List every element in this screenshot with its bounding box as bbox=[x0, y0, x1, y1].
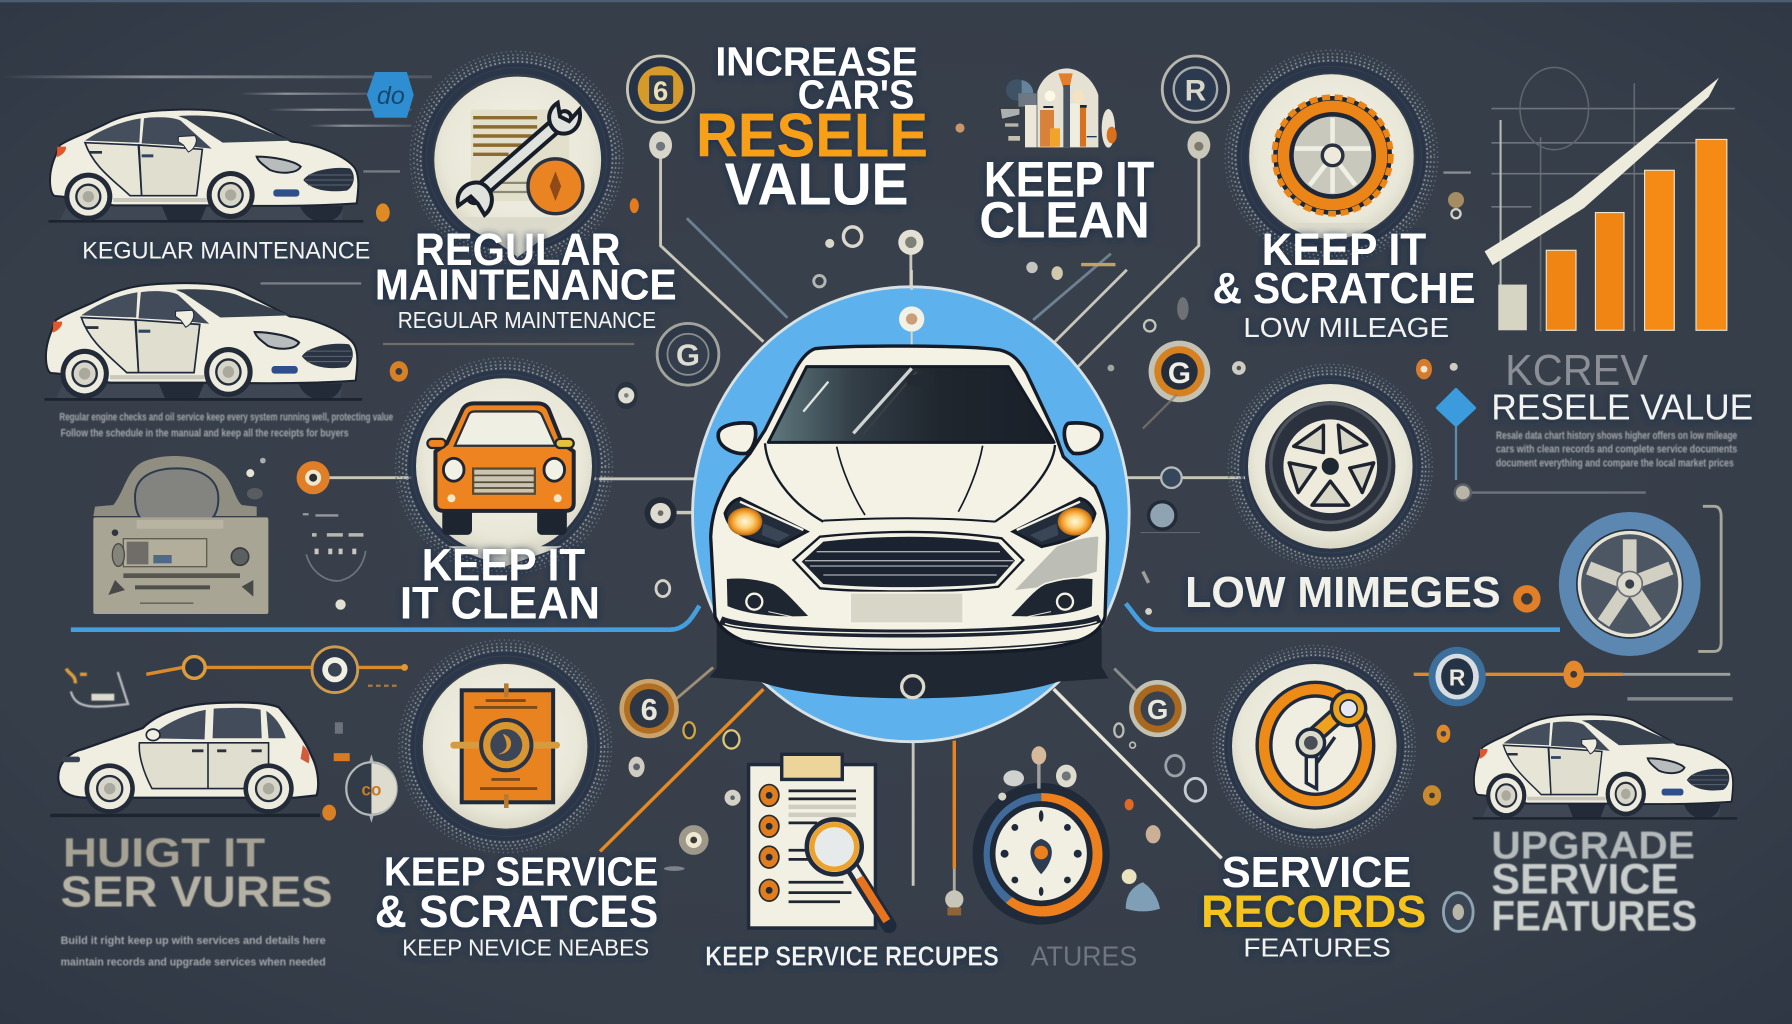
label: upgrade service features: FEATURES bbox=[1491, 892, 1697, 939]
label: huigt it servures: SER VURES bbox=[61, 868, 333, 916]
heading: keep it clean top: KEEP IT bbox=[984, 151, 1155, 208]
small decorative nodes near tire bbox=[1144, 171, 1471, 331]
heading: regular maintenance bbox=[375, 224, 677, 309]
icon: regular maintenance wrench bbox=[410, 51, 623, 264]
icon: blue rim wheel bbox=[1559, 512, 1701, 656]
heading: service records: SERVICE bbox=[1222, 849, 1411, 897]
illustration: faded dashboard box bbox=[93, 456, 268, 614]
heading: keep it & scratche bbox=[1213, 224, 1475, 313]
car: second left sedan bbox=[44, 283, 362, 401]
icon: car wash building bbox=[1000, 68, 1117, 148]
badge: six lower left bbox=[619, 679, 679, 738]
small nodes around gauge bbox=[998, 746, 1161, 911]
icon: alloy wheel bbox=[1228, 364, 1432, 568]
small caption text left upper bbox=[59, 412, 393, 440]
icon: orange tire bbox=[1225, 50, 1438, 263]
small orange node lower bbox=[390, 361, 408, 382]
small top right drop node bbox=[1187, 131, 1210, 159]
small caption text right bbox=[1496, 430, 1737, 469]
small caption text left upper: Follow the schedule in the manual and keep all the receipts for buyers bbox=[61, 428, 349, 440]
small node ring bbox=[656, 581, 670, 597]
compass badge bbox=[346, 754, 397, 823]
small orange node right bbox=[1416, 359, 1458, 379]
bar 1 bbox=[1498, 285, 1527, 330]
badge: G left: G bbox=[676, 338, 700, 373]
title: RESELE bbox=[696, 102, 928, 171]
badge: G lower right: G bbox=[1147, 694, 1168, 725]
left chain: badge O bbox=[183, 647, 408, 693]
label: resele value right: RESELE VALUE bbox=[1491, 386, 1753, 427]
badge: G lower right bbox=[1129, 680, 1186, 737]
label: huigt it servures: HUIGT IT bbox=[63, 829, 265, 875]
bar 5 bbox=[1696, 139, 1727, 330]
heading: keep it clean left bbox=[400, 540, 600, 628]
connector lines bbox=[71, 154, 1733, 894]
small nodes right of records: R bbox=[1449, 665, 1466, 691]
icon: orange service document bbox=[399, 640, 611, 853]
small caption text lower left bbox=[61, 935, 326, 969]
small orange nodes bbox=[322, 722, 350, 821]
faint gauge sketch bbox=[303, 514, 366, 581]
heading: keep service & scratces: & SCRATCES bbox=[375, 886, 658, 937]
trend arrow bbox=[1485, 78, 1719, 265]
icon: orange car keep it clean bbox=[396, 358, 612, 575]
heading: keep it clean left: IT CLEAN bbox=[400, 577, 600, 628]
small node bbox=[615, 382, 638, 409]
heading: low mimeges: LOW MIMEGES bbox=[1185, 569, 1501, 617]
compass badge: co bbox=[361, 779, 381, 799]
small cream dot bbox=[335, 599, 346, 610]
icon: service records ring bbox=[1213, 645, 1415, 847]
bar 3 bbox=[1595, 213, 1624, 330]
badge: six lower left: 6 bbox=[641, 692, 658, 727]
small node near right connector bbox=[1143, 394, 1182, 615]
icon: blue hexagon badge bbox=[367, 72, 414, 118]
bar 4 bbox=[1645, 170, 1674, 330]
subheading: regular maintenance: REGULAR MAINTENANCE bbox=[398, 307, 656, 333]
heading: keep service & scratces bbox=[375, 849, 658, 937]
heading: service records bbox=[1201, 849, 1426, 937]
car: hatchback lower left bbox=[50, 702, 320, 817]
badge: top left six bbox=[627, 56, 694, 122]
heading: keep it & scratche: & SCRATCHE bbox=[1213, 265, 1475, 313]
car: lower right sedan bbox=[1473, 714, 1737, 820]
small node bbox=[1107, 361, 1246, 375]
node on orange line bbox=[945, 890, 963, 915]
subheading: keep service: KEEP NEVICE NEABES bbox=[402, 934, 649, 960]
label: upgrade service features: SERVICE bbox=[1491, 856, 1679, 903]
orange connector node bbox=[297, 461, 330, 494]
small caption text lower left: Build it right keep up with services and details here bbox=[61, 935, 326, 947]
small caption text lower left: maintain records and upgrade services when needed bbox=[61, 957, 326, 969]
subheading: low mileage: LOW MILEAGE bbox=[1243, 312, 1449, 343]
label: keep service recupes: KEEP SERVICE RECUPES bbox=[705, 941, 999, 972]
heading: regular maintenance: REGULAR bbox=[415, 224, 621, 275]
title: CAR'S bbox=[798, 72, 914, 118]
central car front view bbox=[709, 270, 1108, 698]
badge: G right orange: G bbox=[1168, 357, 1191, 390]
small nodes lower left bbox=[629, 722, 741, 871]
car: top left sedan bbox=[48, 110, 363, 223]
icon: clipboard with magnifier bbox=[749, 754, 889, 928]
badge: G right orange bbox=[1149, 341, 1210, 402]
small orange drop bbox=[630, 198, 639, 213]
heading: keep service & scratces: KEEP SERVICE bbox=[384, 849, 658, 895]
faded dots row bbox=[1141, 532, 1200, 534]
icon: blue drop marker bbox=[1438, 390, 1474, 425]
blurred caption fragments bbox=[86, 269, 353, 273]
heading: keep it clean top bbox=[979, 151, 1155, 249]
label: regular maintenance caption: KEGULAR MAINTENANCE bbox=[82, 237, 370, 264]
heading: keep it & scratche: KEEP IT bbox=[1262, 224, 1426, 275]
heading: service records: RECORDS bbox=[1201, 886, 1426, 937]
badge: top right R: R bbox=[1185, 75, 1206, 108]
small nodes right of records bbox=[1423, 647, 1584, 931]
label: huigt it servures bbox=[61, 829, 333, 916]
label: faded atures: ATURES bbox=[1031, 941, 1137, 972]
decorative streak lines top left bbox=[0, 75, 634, 345]
label: upgrade service features bbox=[1491, 824, 1697, 939]
heading: keep it clean top: CLEAN bbox=[979, 191, 1150, 249]
label: kcrev: KCREV bbox=[1505, 347, 1648, 395]
small nodes above central disc bbox=[814, 123, 1115, 287]
badge: G left bbox=[657, 323, 719, 385]
small top left drop node bbox=[649, 131, 672, 159]
small faded car detail bbox=[66, 669, 128, 707]
central blue disc bbox=[693, 287, 1129, 742]
bar chart: rising resale value bbox=[1485, 67, 1735, 331]
title: INCREASE bbox=[715, 38, 918, 84]
bar 2 bbox=[1546, 250, 1576, 330]
title: VALUE bbox=[725, 151, 909, 218]
title bbox=[696, 38, 928, 218]
orange ring node bbox=[1513, 585, 1541, 613]
small dots beside dashboard box bbox=[246, 458, 266, 499]
subheading: features: FEATURES bbox=[1243, 933, 1391, 963]
heading: keep it clean left: KEEP IT bbox=[422, 540, 585, 591]
label: upgrade service features: UPGRADE bbox=[1491, 824, 1695, 867]
icon: blue hexagon badge: do bbox=[377, 82, 405, 110]
small node right of icon bbox=[645, 497, 693, 529]
small caption text left upper: Regular engine checks and oil service keep every system running well, protecting value bbox=[59, 412, 393, 424]
heading: regular maintenance: MAINTENANCE bbox=[375, 261, 677, 309]
small node lower bbox=[1455, 485, 1471, 501]
icon: gauge dial bbox=[973, 783, 1110, 925]
badge: top right R bbox=[1162, 56, 1229, 122]
small rings near badge bbox=[1114, 723, 1206, 801]
badge: top left six: 6 bbox=[653, 76, 668, 107]
small orange node bbox=[376, 203, 390, 222]
